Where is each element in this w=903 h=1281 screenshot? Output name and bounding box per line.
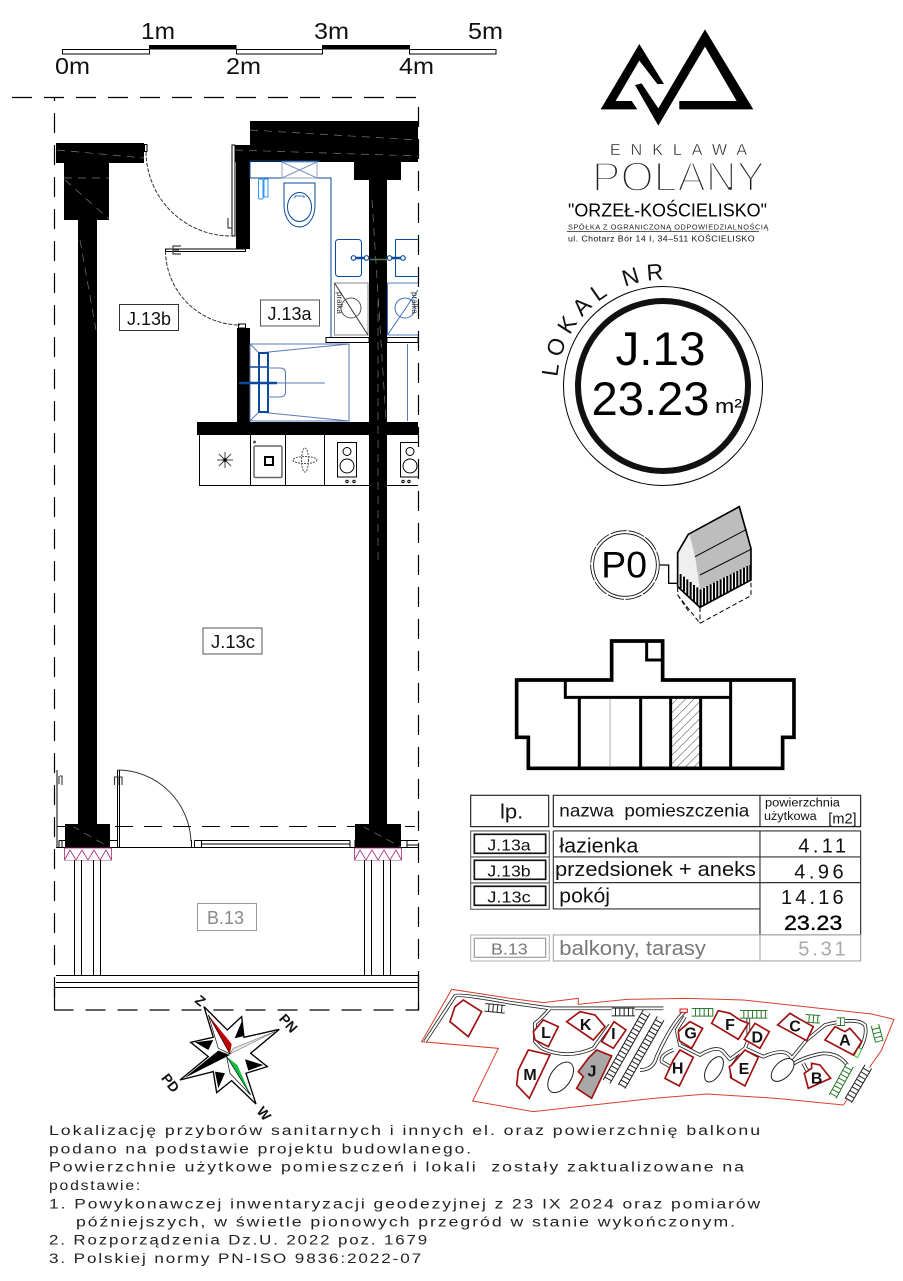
scale bar: 2m <box>226 53 261 79</box>
footer notes: Powierzchnie użytkowe pomieszczeń i lokali zostały zaktualizowane na <box>49 1160 746 1174</box>
kitchen units <box>200 435 418 486</box>
parking rows <box>485 1007 879 1101</box>
room label J.13b <box>120 304 178 330</box>
footer notes: 1. Powykonawczej inwentaryzacji geodezyjnej z 23 IX 2024 oraz pomiarów <box>49 1196 762 1212</box>
icon: fan <box>217 452 233 468</box>
developer logo <box>567 29 769 244</box>
floor marker P0 with building key: P0 <box>601 545 647 586</box>
brand wordmark: POLANY <box>592 153 765 200</box>
footer notes: Lokalizację przyborów sanitarnych i innych el. oraz powierzchnię balkonu <box>49 1123 762 1138</box>
room label J.13c <box>203 628 262 654</box>
room label B.13 <box>198 904 256 930</box>
site plan <box>422 989 894 1112</box>
unit number badge: LOKAL NR <box>542 264 662 376</box>
balcony insulation <box>64 848 402 860</box>
site building letters: L <box>541 1025 551 1042</box>
site ponds <box>543 1054 798 1097</box>
room area table: J.13c <box>487 890 531 907</box>
site building letters: D <box>752 1029 763 1046</box>
entrance and bathroom doors <box>144 144 246 328</box>
footer notes: podstawie: <box>49 1178 142 1193</box>
table header <box>471 795 861 827</box>
icon: hob left <box>338 442 356 483</box>
balcony structure <box>54 860 418 988</box>
dashed unit boundary <box>12 98 418 1010</box>
room label B.13: B.13 <box>207 908 244 928</box>
room area table: przedsionek + aneks <box>555 859 756 881</box>
room area table: lp. <box>500 801 523 823</box>
floor marker P0 with building key <box>591 507 751 623</box>
site paths <box>425 995 866 1078</box>
scale bar <box>55 18 503 79</box>
table rows <box>471 831 861 961</box>
scale bar: 4m <box>399 53 434 79</box>
floor plan walls <box>56 121 418 848</box>
icon: washing machines <box>334 283 419 335</box>
compass rose: W <box>254 1103 275 1124</box>
scale bar: 0m <box>55 53 90 79</box>
room label J.13a: J.13a <box>268 304 312 324</box>
room area table: [m2] <box>828 811 857 827</box>
site building letters: J <box>588 1064 596 1081</box>
compass rose <box>158 992 301 1124</box>
site building letters: K <box>580 1017 592 1034</box>
icon: washbasins <box>336 240 418 276</box>
room area table: użytkowa <box>764 809 817 823</box>
building isometric <box>678 507 751 623</box>
icon: tap diagram <box>293 448 317 472</box>
site building letters: G <box>684 1026 697 1043</box>
icon: kitchen sink <box>253 440 282 478</box>
unit number badge <box>542 264 763 486</box>
room label J.13b: J.13b <box>127 309 171 329</box>
footer notes: 2. Rozporządzenia Dz.U. 2022 poz. 1679 <box>49 1232 429 1248</box>
icon: hob right <box>400 442 418 483</box>
unit number badge: J.13 <box>616 322 706 375</box>
footer notes: 3. Polskiej normy PN-ISO 9836:2022-07 <box>49 1251 423 1266</box>
site buildings <box>450 1000 862 1098</box>
room area table: 4.11 <box>798 835 846 857</box>
compass rose: Z <box>192 992 209 1010</box>
footer notes: podano na podstawie projektu budowlanego. <box>49 1142 473 1156</box>
shelf wall ledge <box>326 338 418 342</box>
room area table: 4.96 <box>794 861 844 883</box>
site building letters: F <box>725 1017 735 1034</box>
site building letters: E <box>739 1061 750 1078</box>
site building letters: A <box>839 1032 851 1049</box>
site building letters: M <box>523 1067 537 1084</box>
site building letters: B <box>811 1070 822 1087</box>
site building letters: I <box>611 1026 616 1043</box>
brand name: ENKLAWA <box>610 142 747 159</box>
room area table: powierzchnia <box>765 796 840 810</box>
bathroom fixtures <box>239 161 419 421</box>
icon: towel holder <box>258 179 263 199</box>
unit number badge: 23.23 <box>592 372 710 425</box>
compass rose: PN <box>276 1011 301 1036</box>
icon: toilet <box>282 162 317 227</box>
room label J.13c: J.13c <box>211 632 255 652</box>
company name: "ORZEŁ-KOŚCIELISKO" <box>568 200 767 220</box>
room area table: 5.31 <box>798 939 846 961</box>
compass rose: PD <box>158 1070 183 1095</box>
room area table: balkony, tarasy <box>559 938 706 960</box>
icon: washing machines: pralka <box>410 292 419 314</box>
company address: ul. Chotarz Bór 14 I, 34–511 KOŚCIELISKO <box>568 232 755 244</box>
room area table: pokój <box>559 886 610 908</box>
room area table: B.13 <box>491 942 528 959</box>
room label J.13a <box>260 300 320 326</box>
site building letters: H <box>672 1060 683 1077</box>
room area table: nazwa pomieszczenia <box>559 801 749 821</box>
floor key plan <box>517 641 794 768</box>
company legal form: SPÓŁKA Z OGRANICZONĄ ODPOWIEDZIALNOŚCIĄ <box>568 222 769 232</box>
site boundary <box>422 989 894 1112</box>
logo mark <box>601 29 753 126</box>
footer notes <box>49 1123 762 1266</box>
room area table: 23.23 <box>784 911 842 935</box>
balcony doors and windows <box>56 770 418 848</box>
room area table: J.13a <box>487 838 531 855</box>
site building letters <box>523 1017 851 1087</box>
site building letters: C <box>789 1019 801 1036</box>
unit number badge: m² <box>715 396 742 418</box>
shower <box>239 344 408 421</box>
scale bar: 3m <box>314 18 349 44</box>
footer notes: późniejszych, w świetle pionowych przegród w stanie wykończonym. <box>76 1214 737 1230</box>
room area table: 14.16 <box>781 887 844 909</box>
room area table <box>471 795 861 961</box>
scale bar: 1m <box>141 18 175 44</box>
icon: washing machines: pralka <box>335 292 344 314</box>
room area table: J.13b <box>487 864 531 881</box>
room area table: łazienka <box>559 835 639 857</box>
scale bar: 5m <box>468 18 503 44</box>
